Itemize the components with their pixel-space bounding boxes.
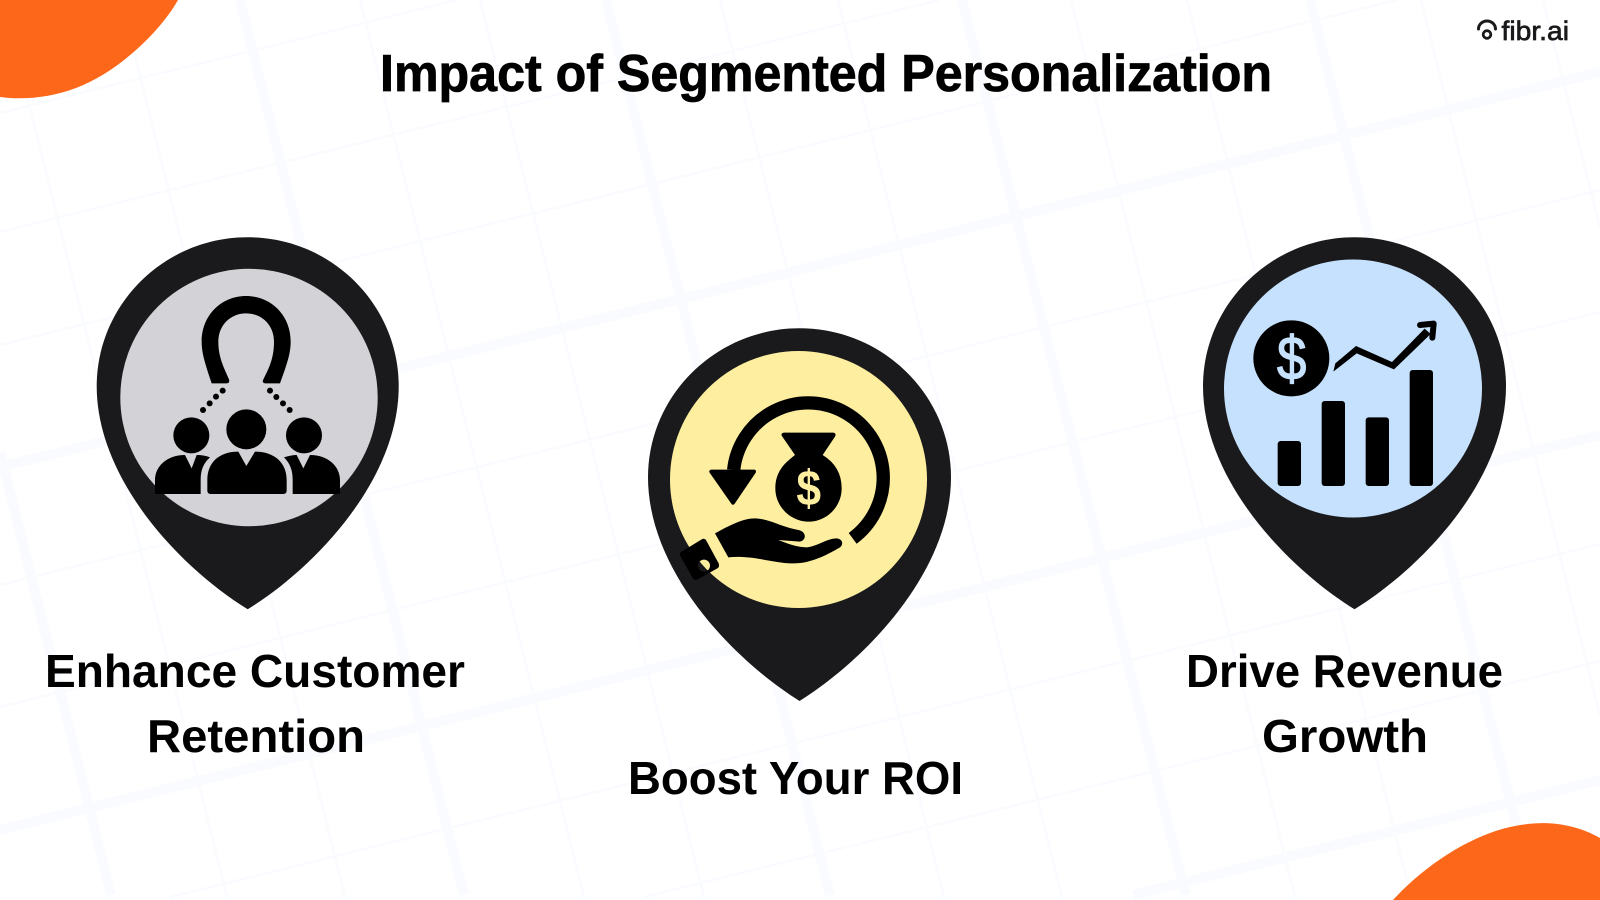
- title: Impact of Segmented Personalization: [380, 45, 1272, 103]
- label: enhance customer retention: Enhance Customer: [45, 645, 465, 697]
- pin inner disc: [1224, 260, 1482, 518]
- pin inner disc: [670, 351, 927, 608]
- pin body: [1203, 237, 1506, 609]
- label: enhance customer retention: [45, 645, 465, 762]
- label: drive revenue growth: Growth: [1262, 710, 1428, 762]
- label: enhance customer retention: Retention: [147, 710, 365, 762]
- panel: enhance customer retention pin: [97, 237, 399, 609]
- logo: fibr.ai: fibr.ai: [1502, 16, 1569, 46]
- pin inner disc: [120, 269, 378, 526]
- icon: money bag return on open hand: [680, 403, 883, 580]
- orange corner shape: top left: [0, 0, 178, 98]
- pin body: [648, 328, 951, 701]
- label: drive revenue growth: [1186, 645, 1503, 762]
- icon: dollar coin and rising bar chart: [1253, 320, 1434, 486]
- label: drive revenue growth: Drive Revenue: [1186, 645, 1503, 697]
- icon: magnet attracting customers: [155, 296, 340, 494]
- panel: boost your ROI pin: [648, 328, 951, 701]
- icon: dollar coin and rising bar chart: $: [1277, 323, 1306, 392]
- icon: money bag return on open hand: $: [796, 460, 821, 516]
- pin body: [97, 237, 399, 609]
- label: boost your ROI: Boost Your ROI: [628, 752, 963, 804]
- panel: drive revenue growth pin: [1203, 237, 1506, 609]
- orange corner shape: bottom right: [1393, 823, 1600, 900]
